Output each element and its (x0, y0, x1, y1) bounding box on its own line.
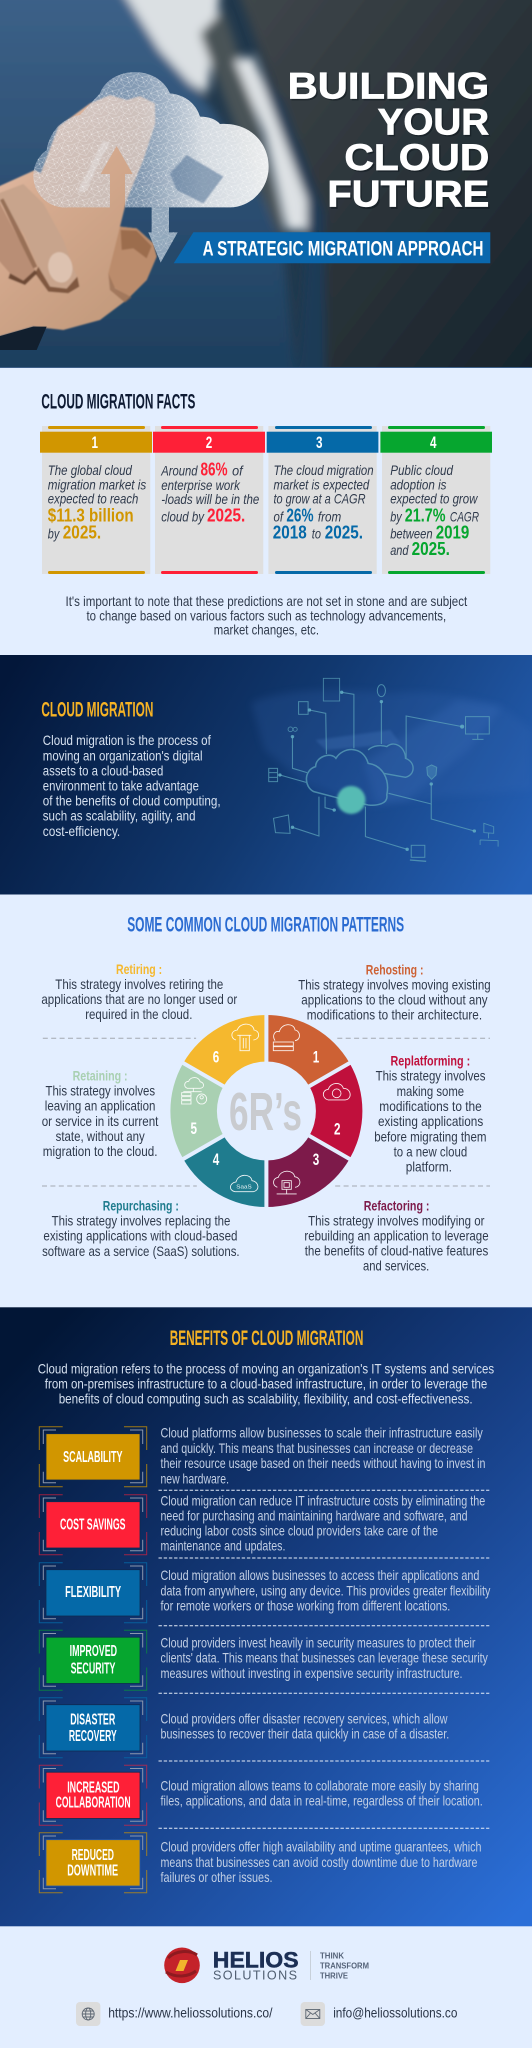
badge: disaster recovery: RECOVERY (69, 1728, 117, 1745)
benefit text: improved security (160, 1636, 488, 1681)
icon: repurchasing SaaS cloud (230, 1175, 258, 1192)
fact card 4 (380, 426, 492, 574)
strategy: retaining: or service in its current (42, 1114, 159, 1129)
donut center label: 6R’s (229, 1082, 302, 1142)
donut segment numbers: 4 (213, 1151, 220, 1169)
fact card 1: 2025. (63, 521, 101, 542)
fact card 3 (267, 426, 378, 574)
badge: reduced downtime (39, 1833, 147, 1893)
strategy: retaining: Retaining : (73, 1069, 128, 1084)
badge: flexibility: FLEXIBILITY (65, 1584, 121, 1601)
icon: retaining cloud data (182, 1078, 207, 1104)
benefit text: flexibility: for remote workers or those working from different locations. (160, 1598, 450, 1613)
fact card 3: from (318, 509, 341, 524)
panel: cloud migration definition (0, 655, 532, 894)
strategy: repurchasing: existing applications with cloud-based (43, 1229, 238, 1244)
fact card 3: 26% (286, 504, 314, 525)
note text: to change based on various factors such as technology advancements, (86, 608, 446, 623)
badge: reduced downtime: DOWNTIME (67, 1862, 118, 1879)
fact card 2: 86% (200, 458, 228, 479)
strategy: retaining (42, 1069, 159, 1159)
fact card 1: 1 (91, 434, 98, 452)
strategy: retiring (41, 962, 238, 1022)
hero title (288, 65, 491, 216)
fact card 2: Around (160, 463, 198, 478)
icon: Helios sun mark (164, 1948, 200, 1983)
badge: scalability: SCALABILITY (63, 1449, 123, 1466)
logo (164, 1948, 369, 1983)
logo: SOLUTIONS (213, 1969, 297, 1983)
strategy: replatforming: existing applications (378, 1114, 483, 1129)
donut segment numbers: 6 (213, 1048, 219, 1066)
donut segment numbers: 5 (191, 1120, 197, 1138)
fact card 4: 2025. (412, 538, 450, 559)
badge: improved security: IMPROVED (70, 1643, 117, 1660)
badge: increased collaboration: INCREASED (67, 1779, 120, 1796)
badge: disaster recovery (39, 1698, 147, 1758)
strategy: repurchasing: This strategy involves replacing the (52, 1214, 230, 1229)
illustration: cloud network and hand (251, 678, 532, 861)
strategy: replatforming: Replatforming : (390, 1054, 470, 1069)
fact card 3: to (312, 526, 321, 541)
strategy: rehosting: Rehosting : (366, 962, 424, 977)
badge: increased collaboration (39, 1765, 147, 1825)
fact card 1: The global cloud (48, 463, 132, 478)
fact card 3: 2018 (273, 521, 307, 542)
hero photo: hand (0, 95, 157, 350)
strategy: refactoring: the benefits of cloud-native features (305, 1244, 488, 1259)
heading: cloud migration: CLOUD MIGRATION (41, 699, 153, 722)
strategy: rehosting: applications to the cloud without any (301, 992, 488, 1007)
icon: rehosting cloud server (273, 1025, 299, 1051)
donut icons (182, 1024, 350, 1194)
definition text: such as scalability, agility, and (43, 809, 195, 824)
fact card 2: cloud by (161, 510, 205, 525)
donut segment numbers: 1 (313, 1048, 319, 1066)
benefits intro text: benefits of cloud computing such as scalability, flexibility, and cost-effectiveness. (59, 1392, 473, 1407)
fact card 2: of (232, 463, 244, 478)
strategy: retaining: This strategy involves (46, 1084, 155, 1099)
benefit text: reduced downtime: failures or other issues. (160, 1870, 272, 1885)
fact card 2: -loads will be in the (161, 492, 260, 507)
panel: footer (76, 1948, 458, 2026)
subtitle banner (174, 232, 490, 263)
note text: market changes, etc. (214, 623, 319, 638)
fact card 2: 2 (206, 434, 212, 452)
strategy: replatforming (374, 1054, 486, 1175)
strategy: replatforming: before migrating them (374, 1129, 486, 1144)
donut segment numbers: 2 (334, 1120, 341, 1138)
panel: migration patterns (41, 914, 491, 1274)
strategy: retiring: required in the cloud. (85, 1007, 192, 1022)
fact card 3: 2025. (325, 521, 363, 542)
badge: scalability (39, 1427, 147, 1487)
dashed dividers (42, 1038, 490, 1186)
fact card 4: CAGR (450, 509, 479, 524)
benefit text: flexibility (160, 1568, 490, 1613)
benefit text: improved security: measures without investing in expensive security infrastructure. (160, 1666, 462, 1681)
hero title: CLOUD (344, 137, 489, 178)
fact card 3: of (274, 509, 284, 524)
badge: cost savings: COST SAVINGS (60, 1516, 126, 1533)
strategy: repurchasing: Repurchasing : (103, 1199, 179, 1214)
website link: https://www.heliossolutions.co/ (108, 2005, 273, 2021)
strategy: replatforming: to a new cloud (394, 1144, 467, 1159)
badge: increased collaboration: COLLABORATION (56, 1794, 131, 1811)
definition text: assets to a cloud-based (43, 763, 163, 778)
strategy: replatforming: This strategy involves (376, 1069, 486, 1084)
fact card 3: The cloud migration (274, 463, 374, 478)
strategy: retaining: state, without any (56, 1129, 145, 1144)
icon: retiring cloud trash (232, 1024, 259, 1051)
benefit text: scalability (160, 1426, 486, 1486)
fact card 3: market is expected (274, 477, 370, 492)
strategy: replatforming: platform. (406, 1160, 452, 1175)
fact card 3: to grow at a CAGR (274, 492, 366, 507)
heading: facts: CLOUD MIGRATION FACTS (41, 390, 195, 413)
strategy: replatforming: making some (397, 1084, 464, 1099)
hero cloud with up and down arrows (33, 72, 269, 263)
strategy: repurchasing (42, 1199, 240, 1259)
panel: cloud migration facts (40, 390, 492, 638)
benefit text: cost savings (160, 1493, 485, 1554)
fact card 4: 2019 (436, 521, 469, 542)
strategy: retiring: This strategy involves retiring the (55, 977, 223, 992)
fact card 4: expected to grow (390, 492, 478, 507)
panel: benefits of cloud migration (0, 1307, 532, 1926)
note text (66, 594, 467, 638)
fact card 4: 21.7% (405, 504, 446, 525)
heading: benefits: BENEFITS OF CLOUD MIGRATION (170, 1327, 363, 1350)
benefit text: scalability: new hardware. (160, 1471, 229, 1486)
hero title: FUTURE (327, 174, 489, 215)
fact card 1 (40, 426, 152, 574)
hero photo: suit background (0, 0, 532, 400)
icon: mail (301, 2002, 325, 2026)
icon: replatforming cloud (323, 1083, 350, 1100)
definition text: cost-efficiency. (43, 824, 120, 839)
strategy: refactoring: This strategy involves modifying or (308, 1213, 485, 1228)
donut segment numbers: 3 (313, 1151, 319, 1169)
donut segment numbers (191, 1048, 341, 1169)
strategy: refactoring (304, 1198, 489, 1274)
fact card 2: 2025. (207, 505, 245, 526)
hero title: YOUR (378, 101, 489, 142)
strategy: retiring: applications that are no longer used or (41, 992, 238, 1007)
chart: 6R's donut (170, 1010, 362, 1212)
fact card 2: enterprise work (161, 478, 241, 493)
note text: It's important to note that these predictions are not set in stone and are subject (66, 594, 467, 609)
definition text: moving an organization's digital (43, 748, 203, 763)
fact card 2 (153, 426, 265, 574)
fact card 3: 3 (316, 434, 323, 452)
badge: disaster recovery: DISASTER (70, 1711, 115, 1728)
badge: reduced downtime: REDUCED (72, 1847, 114, 1864)
logo: THINK (320, 1950, 345, 1960)
logo: TRANSFORM (320, 1960, 369, 1970)
hero title: FUTURE (329, 175, 491, 216)
strategy: refactoring: Refactoring : (364, 1198, 430, 1213)
badge: cost savings (39, 1495, 147, 1555)
strategy: refactoring: rebuilding an application to leverage (304, 1228, 489, 1243)
hero title: BUILDING (288, 65, 489, 106)
benefit text: cost savings: maintenance and updates. (160, 1539, 285, 1554)
email link: info@heliossolutions.co (333, 2005, 458, 2021)
fact card 1: migration market is (48, 477, 146, 492)
badge: flexibility (39, 1563, 147, 1623)
benefit text: disaster recovery: Cloud providers offer disaster recovery services, which allow (160, 1711, 448, 1726)
fact card 1: by (48, 526, 60, 541)
definition text (43, 733, 221, 839)
icon: repurchasing SaaS cloud: SaaS (236, 1184, 252, 1190)
fact card 4: 4 (430, 434, 437, 452)
benefit text: disaster recovery: businesses to recover their data quickly in case of a disaster. (160, 1727, 449, 1742)
icon: globe (76, 2002, 100, 2026)
hero title: YOUR (379, 103, 491, 144)
badge: improved security (39, 1630, 147, 1690)
benefit text: cost savings: reducing labor costs since cloud providers take care of the (160, 1524, 438, 1539)
strategy: rehosting (298, 962, 491, 1022)
benefit text: increased collaboration (160, 1778, 483, 1808)
fact card 4: between (390, 526, 433, 541)
benefit text: disaster recovery (160, 1711, 449, 1742)
strategy: rehosting: This strategy involves moving existing (298, 977, 491, 992)
logo: THRIVE (320, 1971, 348, 1981)
logo: HELIOS (213, 1948, 299, 1973)
strategy: refactoring: and services. (363, 1259, 429, 1274)
benefit text: reduced downtime (160, 1840, 482, 1885)
benefits intro text (38, 1361, 494, 1407)
fact card 4: Public cloud (390, 463, 453, 478)
badge: improved security: SECURITY (71, 1660, 116, 1677)
definition text: Cloud migration is the process of (43, 733, 211, 748)
panel: hero (0, 0, 532, 400)
hero title: CLOUD (346, 139, 491, 180)
strategy: repurchasing: software as a service (SaaS) solutions. (42, 1244, 240, 1259)
fact card 4: adoption is (390, 477, 447, 492)
icon: refactoring cloud chip (274, 1171, 300, 1194)
strategy: retaining: leaving an application (45, 1099, 155, 1114)
fact card 4: by (390, 509, 403, 524)
strategy: retiring: Retiring : (116, 962, 162, 977)
fact card 4: and (390, 543, 409, 558)
hero title: BUILDING (289, 67, 491, 108)
fact card 1: expected to reach (48, 492, 138, 507)
strategy: replatforming: modifications to the (379, 1099, 482, 1114)
fact card 1: $11.3 billion (48, 504, 134, 525)
definition text: of the benefits of cloud computing, (43, 794, 221, 809)
definition text: environment to take advantage (43, 779, 199, 794)
strategy: rehosting: modifications to their architecture. (307, 1007, 482, 1022)
strategy: retaining: migration to the cloud. (43, 1144, 157, 1159)
